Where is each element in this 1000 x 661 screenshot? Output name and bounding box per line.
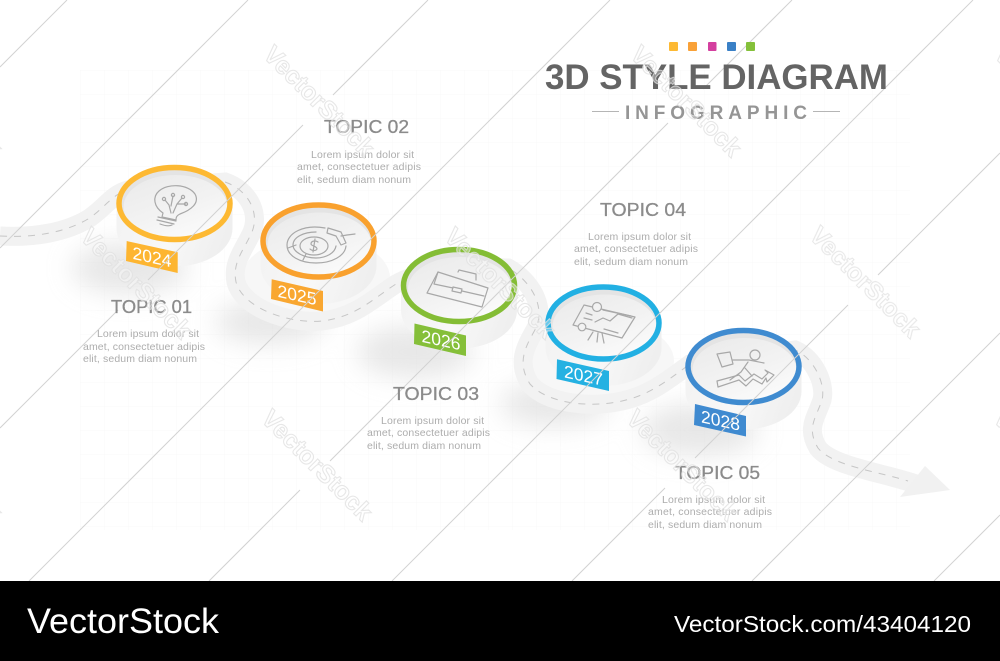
cylinder 1: 2024 xyxy=(116,168,232,273)
topic 01: TOPIC 01 xyxy=(111,296,192,317)
cylinder 3: 2026 xyxy=(401,250,517,356)
watermark text: VectorStock xyxy=(256,404,378,526)
badge: 2027: 2027 xyxy=(564,361,603,390)
icon: light bulb xyxy=(155,186,196,226)
topic 03: TOPIC 03 xyxy=(393,383,479,404)
topic 04: elit, sedum diam nonum xyxy=(574,256,688,268)
topic 03: elit, sedum diam nonum xyxy=(367,440,481,452)
footer bar: VectorStock.com/43404120 xyxy=(674,611,971,637)
topic 02: Lorem ipsum dolor sit xyxy=(311,149,414,161)
topic 05: amet, consectetuer adipis xyxy=(648,506,772,518)
badge: 2028: 2028 xyxy=(701,406,740,435)
cylinder 4: 2027 xyxy=(546,287,662,391)
icon: briefcase xyxy=(427,270,488,307)
topic 04: Lorem ipsum dolor sit xyxy=(588,231,691,243)
topic 01: amet, consectetuer adipis xyxy=(83,341,205,353)
topic 02: amet, consectetuer adipis xyxy=(297,161,421,173)
badge: 2024: 2024 xyxy=(133,243,172,271)
watermark text: VectorStock xyxy=(621,404,743,526)
topic 03 xyxy=(367,383,490,452)
loop discs around cylinders 2 and 4 xyxy=(242,236,674,403)
topic 05: TOPIC 05 xyxy=(675,462,760,483)
badge: 2025: 2025 xyxy=(278,281,317,309)
watermark text: VectorStock xyxy=(439,222,561,344)
topic 02: elit, sedum diam nonum xyxy=(297,174,411,186)
footer bar xyxy=(0,581,1000,661)
cylinder 5: 2028 xyxy=(686,330,802,436)
topic 02: TOPIC 02 xyxy=(324,116,409,137)
watermark text: VectorStock xyxy=(804,221,926,343)
badge: 2026: 2026 xyxy=(422,326,461,354)
topic 05: Lorem ipsum dolor sit xyxy=(662,494,765,506)
soft cylinder shadows xyxy=(72,242,758,456)
colour squares xyxy=(669,42,755,51)
watermark text: VectorStock xyxy=(625,40,747,162)
title: 3D STYLE DIAGRAM xyxy=(545,58,888,97)
topic 04: amet, consectetuer adipis xyxy=(574,243,698,255)
topic 02 xyxy=(297,116,421,186)
topic 01 xyxy=(83,296,205,365)
icon: running businessman xyxy=(717,350,774,387)
topic 01: elit, sedum diam nonum xyxy=(83,353,197,365)
topic 03: Lorem ipsum dolor sit xyxy=(381,415,484,427)
watermark text: VectorStock xyxy=(258,40,380,162)
topic 05: elit, sedum diam nonum xyxy=(648,519,762,531)
topic 04 xyxy=(574,199,698,268)
topic 03: amet, consectetuer adipis xyxy=(367,427,490,439)
subtitle: INFOGRAPHIC xyxy=(625,103,807,124)
footer bar: VectorStock xyxy=(27,602,220,641)
road with arrow xyxy=(0,182,950,497)
topic 05 xyxy=(648,462,772,531)
cylinder 2: 2025 xyxy=(260,205,376,312)
icon: dollar maze target xyxy=(287,227,355,263)
icon: presentation board xyxy=(573,302,635,343)
topic 01: Lorem ipsum dolor sit xyxy=(97,328,199,340)
watermark text xyxy=(0,40,1000,526)
watermark text: VectorStock xyxy=(75,222,197,344)
topic 04: TOPIC 04 xyxy=(600,199,686,220)
